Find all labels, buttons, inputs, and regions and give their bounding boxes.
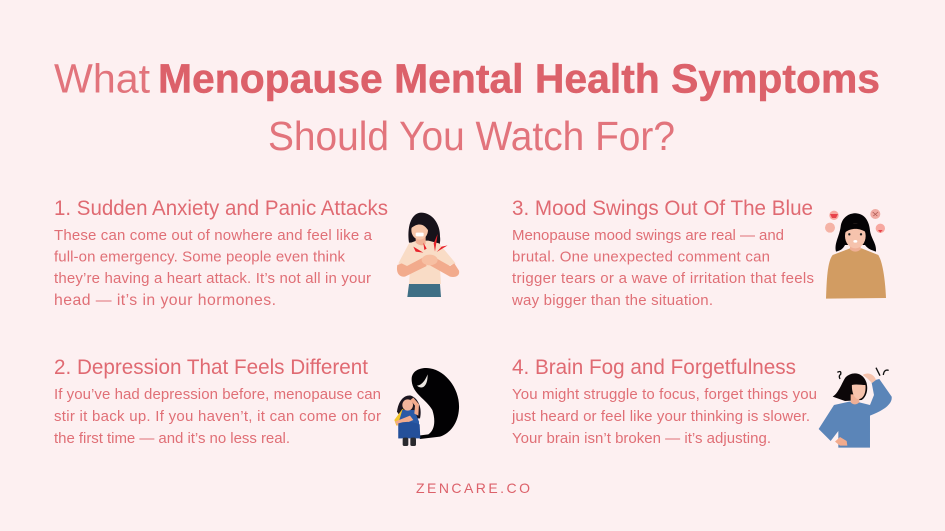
- heading: item 3: 3. Mood Swings Out Of The Blue: [512, 196, 813, 220]
- text block: item 3: brutal. One unexpected comment can: [512, 248, 770, 266]
- panel: mood swings out of the blue: [511, 196, 886, 309]
- text block: item 2: [54, 386, 381, 447]
- panel: brain fog and forgetfulness: [511, 355, 892, 448]
- title: [54, 56, 880, 159]
- panel: depression that feels different: [54, 355, 459, 447]
- text block: item 3: way bigger than the situation.: [511, 292, 713, 309]
- text block: item 3: trigger tears or a wave of irritation that feels: [512, 270, 814, 287]
- text block: item 2: the first time — and it’s no less real.: [54, 430, 290, 447]
- text block: item 4: just heard or feel like your thinking is slower.: [511, 408, 810, 425]
- text block: item 4: You might struggle to focus, forget things you: [512, 386, 817, 403]
- title: What: [54, 56, 151, 102]
- icon: confused woman scratching head: [819, 368, 892, 448]
- icon: woman with mood faces: [825, 209, 886, 299]
- icon: woman with looming shadow: [394, 368, 459, 446]
- panel: sudden anxiety and panic attacks: [54, 196, 459, 309]
- title: Menopause Mental Health Symptoms: [158, 56, 880, 102]
- heading: item 1: 1. Sudden Anxiety and Panic Attacks: [54, 196, 388, 220]
- icon: woman clutching chest: [397, 213, 459, 297]
- footer brand: ZENCARE.CO: [416, 480, 530, 496]
- text block: item 1: they’re having a heart attack. It’s not all in your: [54, 270, 371, 287]
- text block: item 1: These can come out of nowhere and feel like a: [54, 227, 373, 244]
- heading: item 4: 4. Brain Fog and Forgetfulness: [512, 355, 796, 379]
- text block: item 1: full-on emergency. Some people even think: [54, 248, 346, 266]
- text block: item 1: head — it’s in your hormones.: [54, 292, 276, 309]
- text block: item 4: [511, 386, 817, 447]
- text block: item 1: [54, 227, 373, 309]
- heading: item 2: 2. Depression That Feels Different: [54, 355, 368, 379]
- text block: item 4: Your brain isn’t broken — it’s adjusting.: [512, 430, 771, 447]
- text block: item 2: stir it back up. If you haven’t, it can come on for: [54, 408, 381, 425]
- title: Should You Watch For?: [268, 113, 675, 159]
- text block: item 2: If you’ve had depression before, menopause can: [54, 386, 381, 403]
- text block: item 3: [511, 227, 814, 309]
- text block: item 3: Menopause mood swings are real — and: [512, 227, 784, 244]
